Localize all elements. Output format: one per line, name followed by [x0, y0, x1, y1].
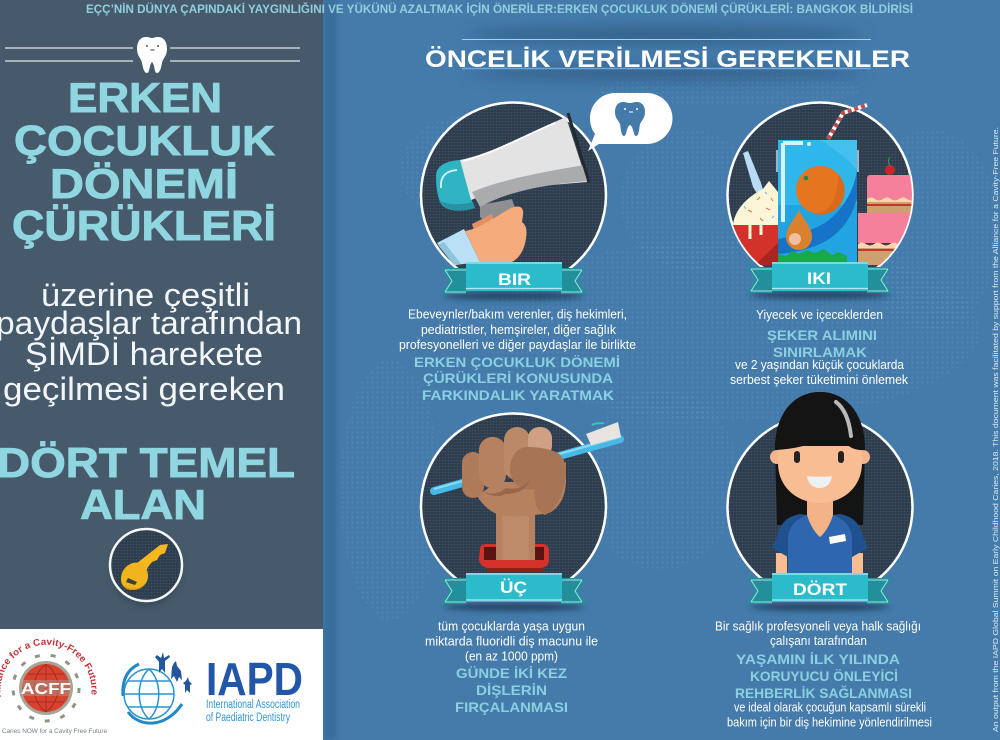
heading: priorities: ÖNCELİK VERİLMESİ GEREKENLER [425, 46, 910, 73]
icon: key [110, 529, 182, 606]
text block: four: KORUYUCU ÖNLEYİCİ [750, 668, 898, 684]
heading: main title: ÇOCUKLUK [14, 117, 275, 164]
ribbon: DÖRT: DÖRT [793, 580, 848, 599]
text block: four [715, 618, 932, 730]
text block: four: REHBERLİK SAĞLANMASI [735, 684, 912, 701]
icon: megaphone [436, 113, 589, 265]
logo: IAPD: IAPD [206, 653, 303, 705]
ribbon: ÜÇ: ÜÇ [500, 578, 527, 597]
circle [421, 414, 606, 598]
text block: subtitle: paydaşlar tarafından [0, 305, 302, 341]
circle [728, 414, 912, 600]
text block: one: pediatristler, hemşireler, diğer sağlık [421, 322, 616, 337]
text block: two: ŞEKER ALIMINI [767, 327, 877, 343]
text block: four: Bir sağlık profesyoneli veya halk sağlığı [715, 618, 921, 634]
heading: four key areas [0, 439, 295, 528]
logo: IAPD: International Association [206, 699, 300, 711]
text block: one: FARKINDALIK YARATMAK [422, 387, 614, 403]
speech bubble [588, 93, 672, 151]
text block: one: profesyonelleri ve diğer paydaşlar ile birlikte [399, 337, 636, 352]
text block: three: DİŞLERİN [476, 682, 547, 698]
heading: four key areas: ALAN [80, 481, 206, 528]
panel: logos [0, 629, 323, 740]
text block: three: FIRÇALANMASI [455, 699, 568, 715]
text block: two: Yiyecek ve içeceklerden [756, 307, 883, 322]
panel: three [421, 414, 621, 715]
icon: cake [858, 157, 915, 265]
text block: two: SINIRLAMAK [773, 344, 867, 360]
ribbon: ÜÇ [441, 573, 586, 611]
text block: three: (en az 1000 ppm) [465, 648, 558, 664]
text block: four: ve ideal olarak çocuğun kapsamlı sürekli [734, 700, 926, 714]
panel: four [715, 392, 932, 730]
text block: three: tüm çocuklarda yaşa uygun [438, 618, 585, 634]
logo: IAPD [123, 652, 303, 724]
ribbon: BIR: BIR [498, 270, 531, 289]
text block: three: miktarda fluoridli diş macunu ile [425, 634, 598, 648]
text block: subtitle: geçilmesi gereken [3, 371, 285, 407]
icon: tooth with double rule [5, 37, 300, 73]
icon: ice cream [733, 151, 778, 265]
ribbon: IKI [747, 262, 892, 299]
panel: left dark panel shadow [323, 0, 337, 740]
header strip text: EÇÇ’NİN DÜNYA ÇAPINDAKİ YAYGINLIĞINI VE YÜKÜNÜ AZALTMAK İÇİN ÖNERİLER:ERKEN ÇOCUKLUK DÖNEMİ ÇÜRÜKLERİ: BANGKOK BİLDİRİSİ [86, 1, 913, 16]
text block: three: GÜNDE İKİ KEZ [456, 665, 567, 681]
text block: one: Ebeveynler/bakım verenler, diş hekimleri, [408, 306, 627, 322]
panel: left dark panel [0, 0, 323, 740]
heading: main title: ERKEN [68, 74, 222, 121]
heading: priorities [425, 27, 910, 80]
circle [421, 102, 606, 288]
text block: one [399, 306, 636, 403]
text block: two [730, 307, 908, 387]
logo: ACFF: Caries NOW for a Cavity Free Future [2, 728, 107, 735]
icon: nurse [770, 392, 870, 573]
heading: four key areas: DÖRT TEMEL [0, 439, 295, 486]
ribbon: BIR [441, 262, 586, 300]
text block: subtitle: ŞİMDİ harekete [25, 336, 263, 372]
text block: three [425, 618, 598, 715]
logo: IAPD: of Paediatric Dentistry [206, 712, 290, 724]
text block: two: serbest şeker tüketimini önlemek [730, 372, 908, 387]
icon: fist with toothbrush [434, 422, 621, 572]
text block: one: ÇÜRÜKLERİ KONUSUNDA [423, 370, 613, 386]
panel: two [728, 102, 915, 387]
text block: four: çalışanı tarafından [770, 633, 867, 648]
icon: juice carton [776, 105, 867, 262]
text block: subtitle: üzerine çeşitli [41, 277, 250, 313]
text block: subtitle [0, 277, 302, 407]
world map dots [340, 74, 1000, 620]
heading: main title: DÖNEMİ [50, 160, 238, 207]
logo: ACFF [0, 638, 107, 735]
logo: ACFF: ACFF [21, 681, 71, 698]
vertical credit text: An output from the IAPD Global Summit on Early Childhood Caries, 2018. This document was facilitated by support from the Alliance for a Cavity-Free Future. [993, 127, 1000, 732]
text block: one: ERKEN ÇOCUKLUK DÖNEMİ [414, 354, 620, 370]
heading: main title: ÇÜRÜKLERİ [12, 202, 276, 249]
ribbon: IKI: IKI [807, 269, 831, 288]
text block: two: ve 2 yaşından küçük çocuklarda [735, 357, 905, 372]
panel: one [399, 93, 672, 403]
circle [728, 102, 912, 288]
heading: main title [12, 74, 276, 249]
text block: four: YAŞAMIN İLK YILINDA [736, 651, 900, 667]
ribbon: DÖRT [747, 573, 892, 611]
text block: four: bakım için bir diş hekimine yönlendirilmesi [727, 714, 932, 730]
